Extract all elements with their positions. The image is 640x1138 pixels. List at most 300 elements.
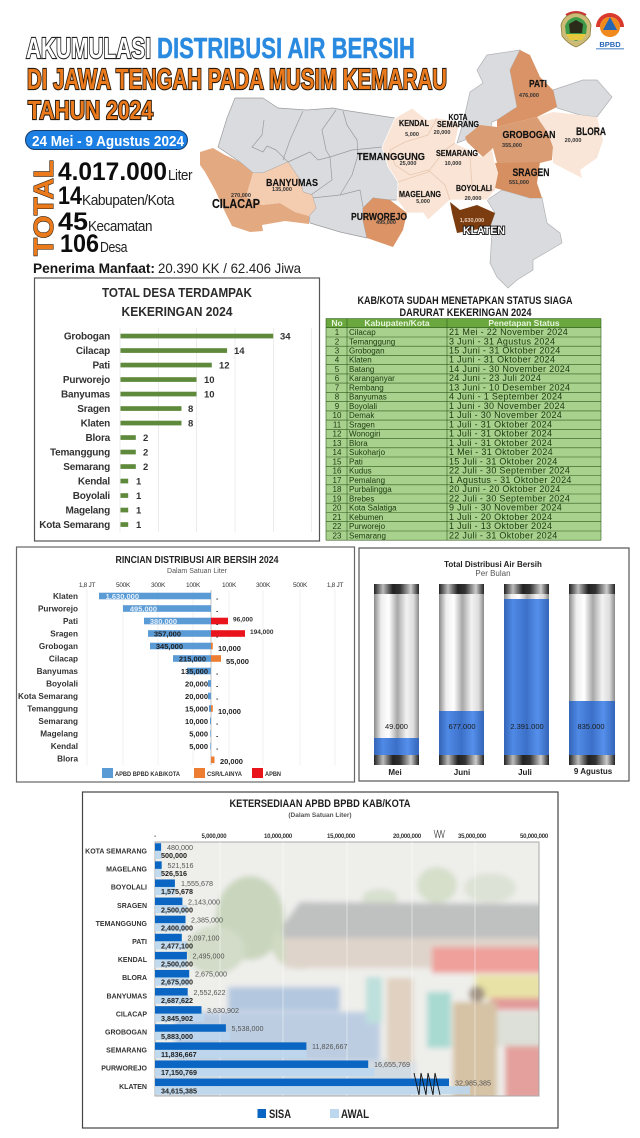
table heading [358,295,573,319]
cylinder: 9 Agustus [569,584,615,776]
bars: 12 [219,360,230,372]
bars: Klaten [81,418,110,430]
value labels: 20,000 [220,757,243,766]
value labels: 10,000 [185,717,208,726]
table rows: 1 Juni - 30 November 2024 [449,401,565,411]
stat: desa [60,230,128,258]
table rows: Sragen [349,420,375,429]
SISA value labels: 11,826,667 [312,1042,347,1051]
map labels: BLORA [576,126,606,138]
stat: kecamatan: Kecamatan [88,219,152,235]
row labels: PURWOREJO [101,1066,148,1073]
cylinder: Juni: 677.000 [448,722,476,731]
map labels: 5,000 [405,132,419,138]
legend: SISA [269,1109,291,1121]
SISA value labels: 2,552,622 [194,988,225,997]
table heading: KAB/KOTA SUDAH MENETAPKAN STATUS SIAGA [358,295,573,307]
chart title: KEKERINGAN 2024 [122,304,233,319]
table rows: 3 [335,346,340,356]
map labels: SEMARANG [436,149,478,158]
SISA value labels: 2,675,000 [195,970,227,979]
table rows: 18 [333,485,342,494]
table rows: 7 [335,383,340,392]
table rows: Brebes [349,494,374,503]
bars: 34 [280,332,291,342]
map labels: 135,000 [272,187,292,193]
value labels: 55,000 [226,657,249,666]
legend: APBD BPBD KAB/KOTA [115,772,181,778]
bars: 1 [136,520,142,531]
bars: Sragen [77,404,110,415]
row labels: Semarang [38,717,78,726]
table rows: 1 Agustus - 31 Oktober 2024 [449,475,572,485]
table rows: 1 Juli - 30 November 2024 [449,410,562,420]
map: Sragen [495,162,542,198]
value labels: - [216,734,219,740]
AWAL value labels: 2,477,100 [161,942,193,950]
APBN bars [211,618,245,637]
table rows: 15 Juli - 31 Oktober 2024 [449,456,558,466]
crowd [387,978,413,1063]
map: Pati [497,50,557,127]
table rows: 20 Juni - 20 Oktober 2024 [449,484,561,494]
stat: kabupaten: 14 [58,182,82,210]
value labels: 5,000 [189,742,208,751]
map: grey northern regencies [457,50,520,143]
map labels: KOTA [448,113,468,122]
map labels: 20,000 [565,138,581,144]
table rows: Temanggung [349,337,395,346]
map of Central Java [200,50,612,288]
axis labels: 5,000,000 [202,834,227,840]
cylinder: Juni [439,584,484,777]
row labels: Grobogan [39,642,78,651]
bars: 1 [136,491,142,502]
bars: 2 [143,462,148,473]
bars: 14 [234,346,245,357]
map labels: PURWOREJO [351,211,407,223]
bars: 1 [136,506,142,516]
table rows: Blora [349,439,368,448]
stat: desa: Desa [100,240,128,256]
row labels: SRAGEN [117,903,147,910]
bars: Temanggung [50,448,110,458]
chart title [102,285,253,319]
table rows: 17 [333,476,342,485]
logo: BPBD: BPBD [599,40,621,49]
chart title: KETERSEDIAAN APBD BPBD KAB/KOTA [230,798,411,810]
bars: Banyumas [61,390,111,400]
AWAL value labels: 34,615,385 [161,1086,197,1095]
value labels: - [216,634,219,641]
background photo: water distribution scene [150,838,544,1100]
AWAL value labels: 3,845,902 [161,1014,193,1023]
table rows: Demak [349,411,375,420]
AWAL value labels: 2,500,000 [161,905,193,914]
table rows: 23 [333,531,342,540]
trees [216,876,284,960]
title [26,33,447,125]
map labels: MAGELANG [399,189,441,199]
SISA value labels: 32,985,385 [455,1078,491,1087]
cylinder: 9 Agustus: 9 Agustus [574,767,613,776]
bars: Purworejo [63,375,110,386]
map: Cilacap [200,148,309,232]
map labels: 1,630,000 [460,218,484,224]
row labels: Purworejo [38,604,78,614]
axis labels: 1,8 JT [79,582,95,589]
value labels: 20,000 [185,680,208,688]
bars: Boyolali [73,491,110,502]
table rows: Boyolali [349,402,377,411]
tanks and jerry cans [228,987,340,1011]
total figures [33,158,301,276]
value labels: 495,000 [130,604,157,614]
value labels: - [216,622,219,628]
cylinder: 9 Agustus: 835.000 [577,722,605,731]
bars: Pati [92,360,110,372]
row labels: Pati [63,617,78,626]
row labels: KENDAL [118,957,148,964]
axis break on Klaten bar [414,1073,440,1095]
SISA value labels: 480,000 [167,843,193,852]
table rows: 15 Juni - 31 Oktober 2024 [449,346,561,356]
value labels [106,592,274,766]
map labels [212,79,606,237]
stat: kabupaten: Kabupaten/Kota [82,193,175,209]
table heading: DARURAT KEKERINGAN 2024 [400,307,532,319]
bars: 1 [136,476,142,488]
axis labels: 300K [151,582,166,589]
table rows: Purbalingga [349,485,392,494]
map labels: KLATEN [463,225,505,237]
AWAL value labels: 2,675,000 [161,978,193,987]
table rows: 1 Juli - 31 Oktober 2024 [449,438,552,448]
value labels: 345,000 [156,642,183,651]
axis labels: 50,000,000 [520,834,549,840]
table rows: 5 [335,365,340,374]
table rows: 2 [335,337,340,346]
beneficiaries [33,260,301,276]
map labels: 10,000 [445,161,461,167]
table rows: 9 Juli - 30 November 2024 [449,503,562,513]
SISA value labels: 5,538,000 [232,1024,263,1033]
map labels: 5,000 [416,199,430,205]
cylinder: Juli: Juli [518,768,532,777]
value labels: 135,000 [181,667,208,676]
table rows: 1 Juli - 13 Oktober 2024 [449,521,552,531]
title: line 1: DISTRIBUSI AIR BERSIH [157,33,415,65]
SISA value labels: 2,385,000 [191,915,223,924]
row labels: Banyumas [37,667,78,676]
stat: kabupaten [58,182,175,210]
value labels: 194,000 [250,629,274,636]
table rows: 14 [333,448,342,457]
row labels: KOTA SEMARANG [85,848,148,856]
axis labels: 20,000,000 [393,834,422,840]
table rows: Wonogiri [349,430,381,439]
map: grey western regencies [218,98,398,238]
table rows: 22 Juli - 30 September 2024 [449,466,570,476]
map: Purworejo [363,198,407,247]
chart subtitle: Dalam Satuan Liter [167,568,228,575]
title: line 3: TAHUN 2024 [28,95,153,125]
SISA value labels [167,843,491,1087]
row labels: TEMANGGUNG [96,921,148,928]
table rows: Banyumas [349,393,387,402]
table rows: Kebumen [349,513,383,522]
table rows: Cilacap [349,328,376,337]
map labels: SRAGEN [512,167,550,179]
row labels: Kendal [51,742,78,751]
axis labels: 300K [256,582,271,589]
panel: total distribusi per bulan [359,548,629,781]
stat: liter: Liter [168,168,193,184]
value labels: - [216,608,219,616]
table rows: Sukoharjo [349,448,386,457]
AWAL value labels: 5,883,000 [161,1032,193,1041]
value labels: 15,000 [185,704,208,714]
date pill: 24 Mei - 9 Agustus 2024 [32,134,184,150]
row labels: Temanggung [27,704,78,714]
table rows: 13 Juni - 10 Desember 2024 [449,382,570,392]
table rows: 4 Juni - 1 September 2024 [449,392,563,402]
bars: Blora [85,433,111,444]
total vertical label: TOTAL [28,160,59,256]
value labels: 1,630,000 [106,592,139,601]
legend: AWAL [341,1109,369,1121]
AWAL bars [155,851,470,1094]
bars: 8 [188,404,193,415]
chart subtitle: (Dalam Satuan Liter) [288,812,352,819]
row labels: PATI [132,939,147,946]
map: pale central regencies [382,108,498,220]
row labels [85,848,148,1091]
panel: rincian distribusi air bersih [16,547,354,782]
value labels: 10,000 [218,707,241,716]
map labels: 20,000 [465,196,481,202]
row labels: Boyolali [46,680,78,688]
row labels: Klaten [53,592,78,601]
map: Klaten [450,202,495,233]
row labels: BANYUMAS [107,993,147,1000]
value labels: 96,000 [233,616,253,624]
bars: Kendal [78,476,110,488]
row labels: GROBOGAN [105,1030,147,1036]
CSR bars [211,643,221,763]
map labels: GROBOGAN [502,129,556,141]
axis labels [79,582,343,589]
AWAL value labels: 500,000 [161,851,187,860]
SISA bars [155,843,449,1086]
table rows: 19 [333,494,342,503]
row labels: Cilacap [49,654,78,664]
map: Rembang [553,80,612,117]
table rows: 22 Juli - 31 Oktober 2024 [449,530,558,540]
legend: APBN [265,772,281,778]
title: line 1: AKUMULASI [26,33,151,65]
value labels: 380,000 [150,617,177,626]
axis labels: 35,000,000 [458,834,487,840]
row labels: CILACAP [116,1011,147,1018]
axis labels: 100K [222,582,237,589]
legend [258,1109,369,1121]
value labels: - [216,721,219,728]
value labels: 10,000 [218,644,241,653]
map labels: PATI [529,79,547,90]
chart subtitle: Per Bulan [475,569,511,578]
table rows: Rembang [349,383,384,392]
table rows: 1 [335,328,340,337]
table header: No [331,318,343,328]
value labels: - [216,596,219,603]
table rows: Pati [349,457,363,466]
table rows: 21 Mei - 22 November 2024 [449,327,568,337]
stat: kecamatan: 45 [58,208,88,236]
table rows: Grobogan [349,346,385,356]
SISA value labels: 2,495,000 [192,952,224,961]
SISA value labels: 2,143,000 [188,897,220,906]
AWAL value labels: 526,516 [161,869,187,878]
row labels: Kota Semarang [18,692,78,701]
row labels: BOYOLALI [111,885,147,892]
legend: CSR/LAINYA [207,772,243,778]
table rows: Klaten [349,356,372,365]
bars [39,332,291,531]
axis labels: 500K [293,582,308,589]
axis labels [154,830,549,840]
table rows: 1 Mei - 31 Oktober 2024 [449,447,553,457]
AWAL value labels: 2,400,000 [161,923,193,932]
cylinder: Juli [504,584,549,777]
table rows: 10 [333,411,342,420]
bars: 8 [188,418,193,430]
SISA value labels: 16,655,769 [374,1060,410,1069]
beneficiaries: 20.390 KK / 62.406 Jiwa [158,260,301,276]
value labels: 357,000 [154,630,181,638]
stat: desa: 106 [60,230,99,258]
axis labels: 100K [186,582,201,589]
map labels: 25,000 [400,161,416,167]
map: Grobogan [465,117,553,163]
table rows: 3 Juni - 31 Agustus 2024 [449,336,555,346]
table rows: Pemalang [349,476,385,485]
map labels: BOYOLALI [456,184,492,193]
row labels: BLORA [122,975,147,982]
row labels: SEMARANG [106,1048,148,1055]
table rows: Kudus [349,467,372,476]
axis labels: - [154,834,156,840]
chart title: Total Distribusi Air Bersih [444,560,542,569]
AWAL value labels: 1,575,678 [161,887,193,896]
table header: Penetapan Status [488,318,560,328]
bars: 2 [143,448,148,458]
bars: Grobogan [64,332,110,342]
table rows: 4 [335,356,340,365]
bars: 10 [204,390,215,400]
logo: Jawa Tengah shield [561,12,591,47]
map: grey southern regencies [487,190,562,288]
table rows: 14 Juni - 30 November 2024 [449,364,570,374]
table rows: 16 [333,467,342,476]
map: Blora [537,112,603,178]
map labels: 355,000 [502,143,522,149]
table header [326,318,601,328]
bars: Semarang [63,462,110,473]
SISA value labels: 3,630,902 [207,1006,239,1015]
value labels: - [216,684,219,690]
table rows: 21 [333,513,342,522]
value labels: 20,000 [185,692,208,701]
table rows: 1 Juni - 31 Oktober 2024 [449,355,555,365]
officer [453,1002,497,1100]
map labels: CILACAP [212,197,260,211]
APBD bars [99,593,211,749]
row labels: Blora [57,754,78,764]
bars: Cilacap [76,346,110,357]
map labels: BANYUMAS [266,177,318,189]
title: line 1 [26,33,415,65]
title: line 2: DI JAWA TENGAH PADA MUSIM KEMARAU [27,64,447,96]
roof [283,902,544,938]
row labels [18,592,78,764]
AWAL value labels [161,851,197,1095]
beneficiaries: Penerima Manfaat: [33,260,155,276]
table rows: 15 [333,457,342,466]
map labels: KENDAL [399,119,429,128]
table rows: Batang [349,365,374,374]
SISA value labels: 1,555,678 [181,879,213,888]
cylinder: Mei: 49.000 [385,722,408,731]
truck [432,947,544,973]
map labels: 20,000 [434,130,450,136]
map labels: SEMARANG [437,120,479,129]
map: Banyumas [246,162,316,216]
AWAL value labels: 11,836,667 [161,1050,197,1059]
row labels: Magelang [40,730,78,738]
panel: total desa terdampak bar chart [34,278,320,541]
table rows: 22 [333,522,342,531]
table: status siaga darurat kekeringan [326,318,601,540]
table rows: 24 Juni - 23 Juli 2024 [449,373,541,383]
logo: BPBD [596,13,624,50]
table header: Kabupaten/Kota [364,318,430,328]
axis labels: 500K [116,582,131,589]
table rows: Karanganyar [349,374,395,383]
table rows: 11 [333,420,342,429]
bars: 10 [204,375,215,386]
row labels: Sragen [50,630,78,638]
table rows: 9 [335,402,340,411]
table rows: Purworejo [349,522,386,531]
AWAL value labels: 17,150,769 [161,1068,197,1077]
AWAL value labels: 2,500,000 [161,960,193,969]
cylinder: Juli: 2.391.000 [510,722,544,731]
legend [102,768,281,778]
table rows: Semarang [349,531,386,540]
value labels: - [216,746,219,753]
map labels: 476,000 [519,93,539,99]
row labels: KLATEN [119,1084,147,1091]
value labels: - [216,671,219,678]
table rows: 6 [335,374,340,383]
map labels: 270,000 [231,193,251,199]
stat: kecamatan [58,208,152,236]
SISA value labels: 521,516 [168,861,193,870]
chart title: TOTAL DESA TERDAMPAK [102,285,253,300]
bars: 2 [143,433,148,444]
bars: Magelang [65,506,110,516]
